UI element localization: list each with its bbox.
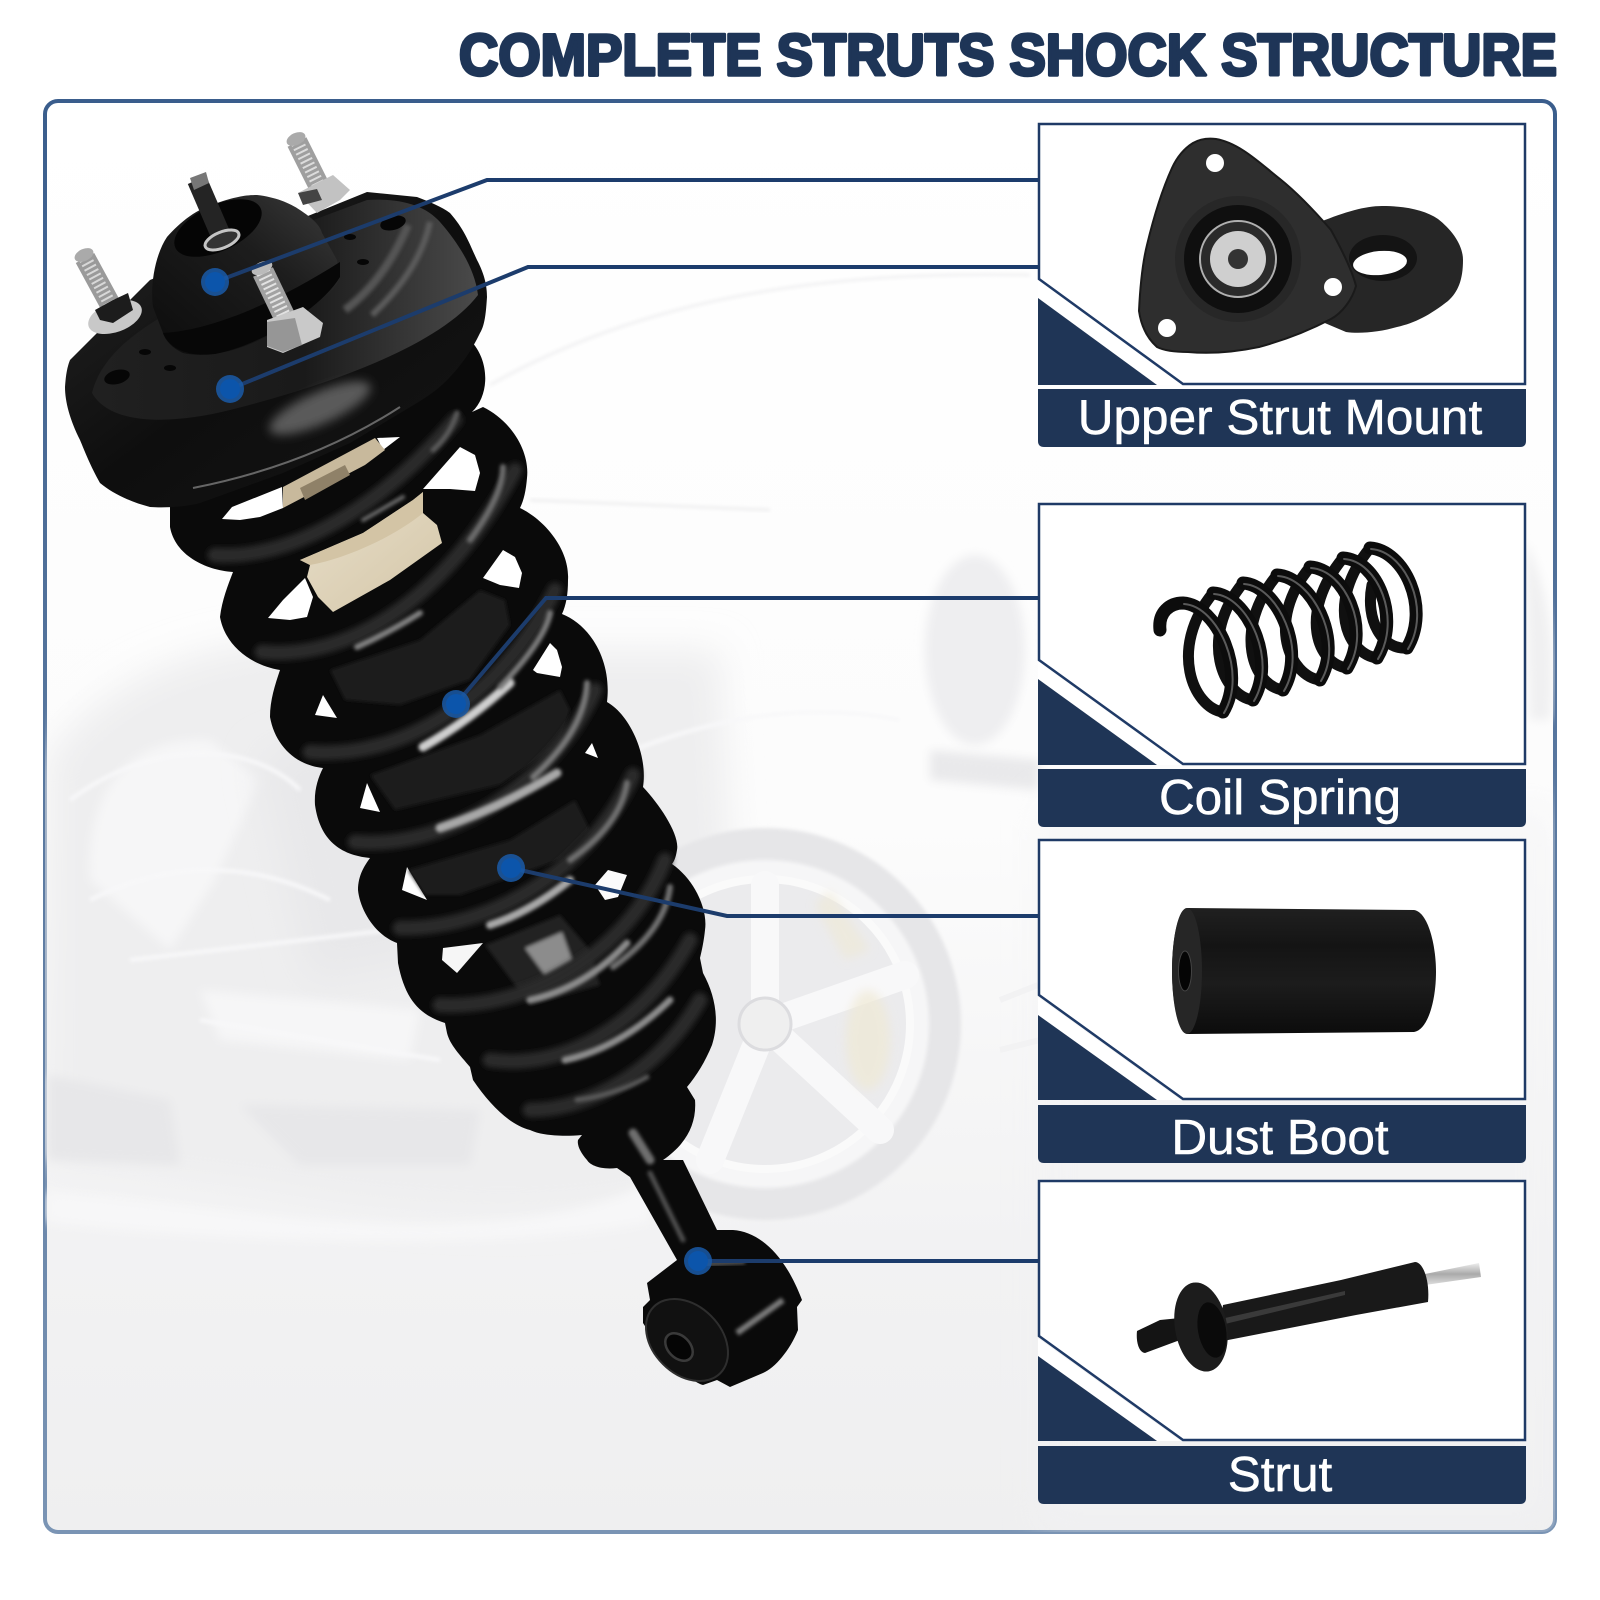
callout line: strut — [684, 1247, 1038, 1275]
coil highlights — [357, 413, 683, 1240]
ghost far wheel — [925, 555, 1025, 745]
panel: dust boot — [1038, 840, 1525, 1100]
icon: coil spring — [1160, 548, 1417, 713]
bolt stud front — [249, 258, 323, 353]
label: upper strut mount: Upper Strut Mount — [1078, 390, 1482, 445]
callout line: mount seat — [216, 267, 1038, 403]
bolt stud back — [284, 129, 350, 213]
title: COMPLETE STRUTS SHOCK STRUCTURE — [459, 23, 1557, 88]
label: strut — [1038, 1446, 1526, 1504]
label: strut: Strut — [1228, 1447, 1333, 1502]
ghost front wheel — [664, 828, 961, 1220]
coil gaps — [222, 437, 627, 973]
strut tube — [485, 915, 600, 1005]
lower bushing — [630, 1262, 783, 1397]
dust boot shading — [330, 590, 590, 895]
callout line: coil spring — [442, 598, 1038, 718]
callout line: upper strut mount — [201, 180, 1038, 296]
callout line: dust boot — [497, 854, 1038, 916]
label: coil spring — [1038, 769, 1526, 827]
bump stop — [283, 438, 442, 612]
label: dust boot — [1038, 1105, 1526, 1165]
panel: upper strut mount — [1038, 124, 1525, 385]
upper mount drum — [65, 129, 487, 507]
label: dust boot: Dust Boot — [1171, 1110, 1389, 1165]
panel: strut — [1038, 1181, 1525, 1441]
mount holes — [103, 213, 407, 387]
leader lines and markers — [201, 180, 1038, 1275]
center dome — [152, 195, 340, 355]
label: coil spring: Coil Spring — [1159, 770, 1401, 825]
icon: strut — [1137, 1262, 1481, 1376]
bolt stud left — [72, 245, 146, 341]
center stud — [190, 172, 242, 254]
panel: coil spring — [1038, 504, 1525, 765]
icon: upper strut mount — [1139, 139, 1463, 353]
icon: dust boot — [1172, 908, 1436, 1034]
coil broad sheen — [215, 420, 700, 1110]
ghost car background — [46, 274, 1555, 1530]
main strut assembly — [65, 129, 802, 1397]
strut silhouette: coil, seat, collar, rod and bushing — [170, 340, 802, 1387]
